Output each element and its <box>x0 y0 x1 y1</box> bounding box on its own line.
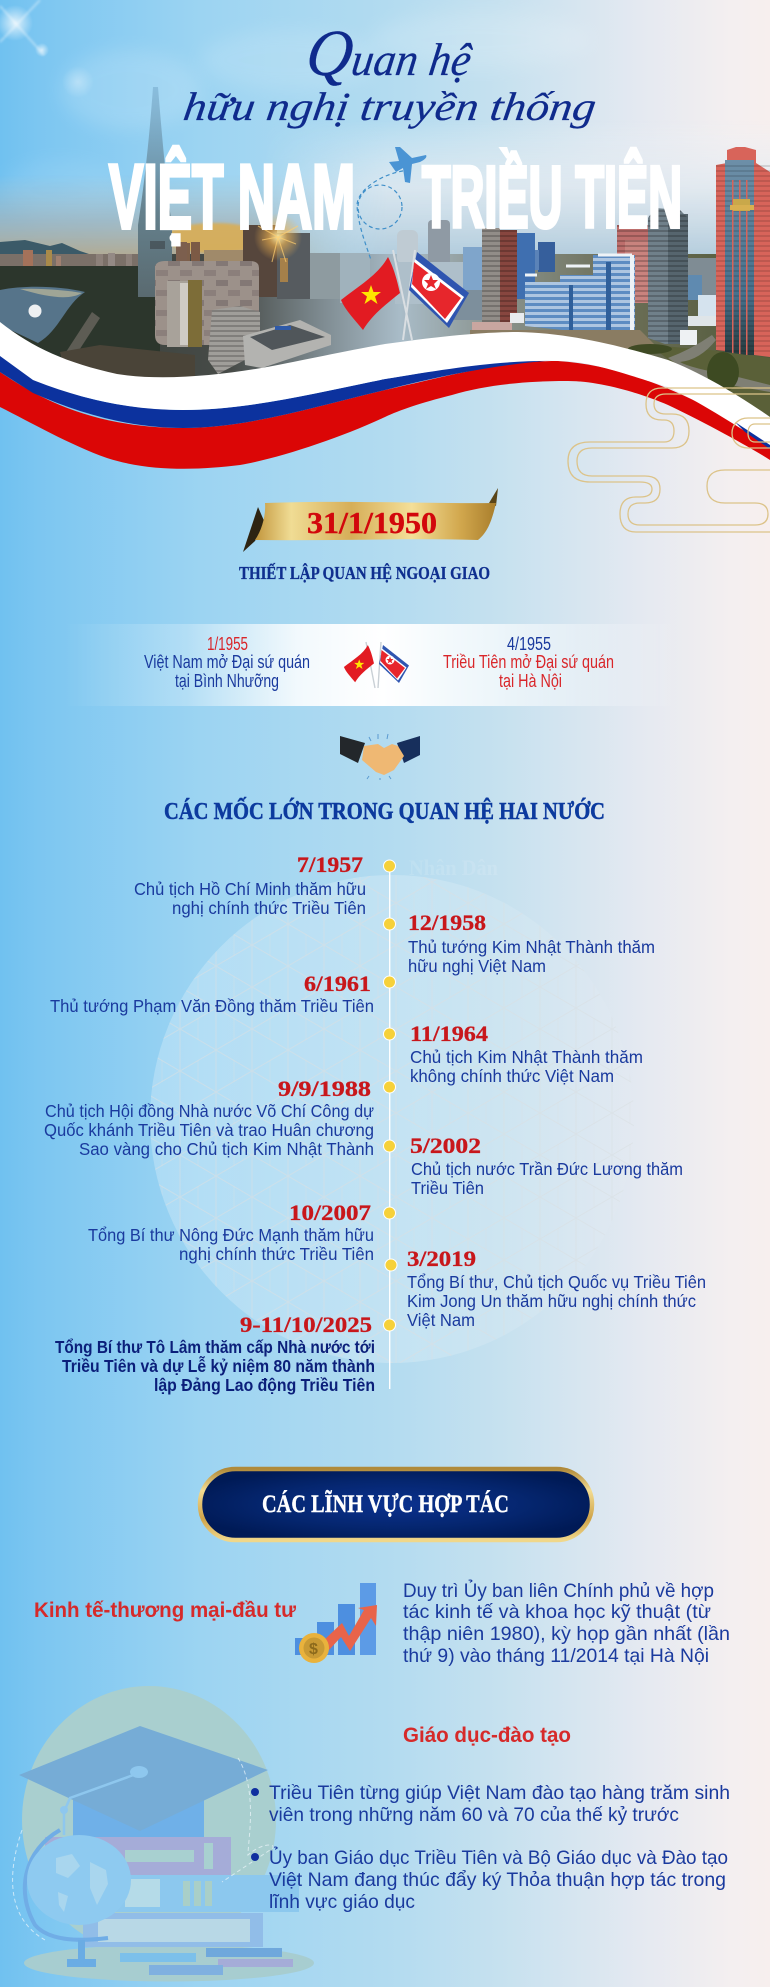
red hotel tower <box>716 147 770 357</box>
Lotte tower <box>138 87 187 297</box>
milestone 5/2002: Chủ tịch nước Trần Đức Lương thăm <box>411 1159 683 1179</box>
milestone 10/2007: Tổng Bí thư Nông Đức Mạnh thăm hữu <box>88 1225 374 1245</box>
bullet 1: viên trong những năm 60 và 70 của thế kỷ trước <box>269 1804 679 1826</box>
banner tail left <box>243 507 265 552</box>
left: distant mountains and district <box>0 240 243 266</box>
milestone 6/1961 <box>50 971 374 1016</box>
milestone 12/1958 <box>408 910 655 976</box>
subheading: diplomatic relations: THIẾT LẬP QUAN HỆ NGOẠI GIAO <box>239 563 490 583</box>
ribbon white band <box>0 322 770 447</box>
milestone 5/2002 <box>410 1133 683 1198</box>
milestone 10/2007 <box>88 1200 374 1264</box>
milestone 9/9/1988 <box>44 1076 374 1159</box>
distant right buildings <box>688 258 716 326</box>
grey glass tower <box>648 208 697 345</box>
milestone 11/1964: 11/1964 <box>410 1021 488 1046</box>
date: 31/1/1950 <box>307 505 437 540</box>
title: script heading <box>181 17 599 129</box>
heading pill: cooperation fields <box>200 1469 592 1540</box>
DPRK flag <box>409 252 469 328</box>
milestone 6/1961: 6/1961 <box>304 971 371 996</box>
title line 2: hữu nghị truyền thống <box>181 84 599 129</box>
milestone 9-11/10/2025: Tổng Bí thư Tô Lâm thăm cấp Nhà nước tới <box>55 1337 375 1357</box>
bullet 2: lĩnh vực giáo dục <box>269 1891 415 1913</box>
cap base <box>73 1790 204 1838</box>
milestone 11/1964 <box>410 1021 643 1086</box>
pink tower <box>617 225 648 303</box>
pencils <box>120 1948 293 1975</box>
right: DPRK embassy <box>443 634 614 691</box>
left: Vietnam embassy: Việt Nam mở Đại sứ quán <box>144 652 310 672</box>
left: Vietnam embassy: tại Bình Nhưỡng <box>175 671 279 691</box>
ribbon: red, blue and white waves <box>0 322 770 469</box>
education heading: Giáo dục-đào tạo <box>403 1724 571 1747</box>
graduation cap top <box>19 1726 268 1831</box>
section: education and training <box>251 1724 730 1913</box>
icon: handshake <box>340 734 420 780</box>
gold line decoration <box>568 388 770 532</box>
backdrop circle <box>22 1686 276 1954</box>
milestone 3/2019: Việt Nam <box>407 1310 475 1330</box>
ribbon blue band <box>0 354 558 428</box>
sun-lit towers <box>243 213 370 303</box>
milestone 7/1957: nghị chính thức Triều Tiên <box>172 898 366 918</box>
heading: milestones: CÁC MỐC LỚN TRONG QUAN HỆ HAI NƯỚC <box>164 798 605 825</box>
milestone 3/2019: 3/2019 <box>407 1246 476 1271</box>
milestone 11/1964: Chủ tịch Kim Nhật Thành thăm <box>410 1047 643 1067</box>
banner band <box>255 502 496 540</box>
right: DPRK embassy: Triều Tiên mở Đại sứ quán <box>443 652 614 672</box>
milestone 3/2019 <box>407 1246 706 1330</box>
left: Vietnam embassy <box>144 634 310 691</box>
header: sky glow and map clouds <box>0 0 590 220</box>
milestone 9-11/10/2025 <box>55 1312 375 1395</box>
Vietnam flag <box>341 257 400 330</box>
front low buildings <box>208 306 331 374</box>
bullet 1: Triều Tiên từng giúp Việt Nam đào tạo hàng trăm sinh <box>269 1782 730 1804</box>
heading pill: cooperation fields: CÁC LĨNH VỰC HỢP TÁC <box>262 1490 509 1518</box>
section: economy, trade, investment <box>34 1578 730 1667</box>
milestone 12/1958: hữu nghị Việt Nam <box>408 956 546 976</box>
milestone 3/2019: Tổng Bí thư, Chủ tịch Quốc vụ Triều Tiên <box>407 1272 706 1292</box>
bullet 2: Ủy ban Giáo dục Triều Tiên và Bộ Giáo dục và Đào tạo <box>269 1845 728 1869</box>
ground plane <box>160 254 770 376</box>
icon: plane with dashed route <box>357 147 426 260</box>
economy text: tác kinh tế và khoa học kỹ thuật (từ <box>403 1601 711 1623</box>
economy text: Duy trì Ủy ban liên Chính phủ về hợp <box>403 1578 714 1602</box>
book stack <box>45 1837 299 1947</box>
icon: growth chart with coin <box>295 1583 377 1663</box>
blue towers <box>517 233 555 299</box>
ribbon blue sliver, right <box>735 422 770 449</box>
tall brown tower <box>472 228 517 330</box>
watermark: Nhân Dân <box>409 855 498 880</box>
milestone 9-11/10/2025: lập Đảng Lao động Triều Tiên <box>154 1375 375 1395</box>
white sphere on the lake <box>28 304 42 318</box>
milestone 7/1957: Chủ tịch Hồ Chí Minh thăm hữu <box>134 879 366 899</box>
large grey building <box>155 261 259 347</box>
bullet 2: Việt Nam đang thúc đẩy ký Thỏa thuận hợp tác trong <box>269 1869 726 1891</box>
Việt Nam: VIỆT NAM <box>109 146 355 248</box>
panel: embassy openings <box>64 624 678 706</box>
milestone 3/2019: Kim Jong Un thăm hữu nghị chính thức <box>407 1291 696 1311</box>
dashed arcs <box>13 1758 273 1940</box>
milestone 7/1957: 7/1957 <box>297 852 363 877</box>
sky behind the skyline <box>0 131 770 254</box>
economy text: thập niên 1980), kỳ họp gần nhất (lần <box>403 1623 730 1645</box>
bullet 2 <box>251 1845 728 1913</box>
milestone 9/9/1988: Quốc khánh Triều Tiên và trao Huân chương <box>44 1120 374 1140</box>
milestone 9-11/10/2025: Triều Tiên và dự Lễ kỷ niệm 80 năm thành <box>62 1355 375 1376</box>
blue apartment complex <box>470 255 660 350</box>
header photo: city skyline <box>0 87 770 434</box>
economy text <box>403 1578 730 1667</box>
milestone 10/2007: 10/2007 <box>289 1200 371 1225</box>
icon: large crossed flags <box>341 250 469 340</box>
left: Vietnam embassy: 1/1955 <box>207 634 248 654</box>
title: country names <box>109 146 682 248</box>
title line 1: Quan hệ <box>302 17 478 90</box>
right: DPRK embassy: tại Hà Nội <box>499 671 562 691</box>
right foreground: trees and road <box>628 335 770 420</box>
left: dark trees and lake <box>0 266 195 377</box>
timeline axis <box>389 866 390 1389</box>
illustration: graduation cap, books and globe <box>13 1686 314 1982</box>
milestone 9/9/1988: Sao vàng cho Chủ tịch Kim Nhật Thành <box>79 1139 374 1159</box>
milestone 11/1964: không chính thức Việt Nam <box>410 1066 614 1086</box>
milestone 9/9/1988: Chủ tịch Hội đồng Nhà nước Võ Chí Công dự <box>45 1101 374 1121</box>
banner tail right <box>489 488 498 506</box>
timeline <box>44 852 706 1395</box>
ground ellipse <box>24 1944 314 1982</box>
economy heading: Kinh tế-thương mại-đầu tư <box>34 1599 297 1622</box>
pale distant towers <box>395 220 484 320</box>
milestone 9/9/1988: 9/9/1988 <box>278 1076 371 1101</box>
economy text: thứ 9) vào tháng 11/2014 tại Hà Nội <box>403 1645 709 1667</box>
milestone 10/2007: nghị chính thức Triều Tiên <box>179 1244 374 1264</box>
globe <box>25 1830 131 1967</box>
timeline dots <box>384 860 397 1331</box>
tassel <box>60 1766 148 1835</box>
milestone 12/1958: Thủ tướng Kim Nhật Thành thăm <box>408 937 655 957</box>
patterned circle behind timeline <box>150 875 634 1363</box>
milestone 9-11/10/2025: 9-11/10/2025 <box>240 1312 372 1337</box>
milestone 5/2002: Triều Tiên <box>411 1178 484 1198</box>
bullet 1 <box>251 1782 730 1826</box>
milestone 6/1961: Thủ tướng Phạm Văn Đồng thăm Triều Tiên <box>50 996 374 1016</box>
icon: small crossed flags <box>344 642 409 688</box>
milestone 12/1958: 12/1958 <box>408 910 486 935</box>
milestone 5/2002: 5/2002 <box>410 1133 481 1158</box>
icon: growth chart with coin: $ <box>309 1641 318 1658</box>
ribbon red band <box>0 361 770 469</box>
right: DPRK embassy: 4/1955 <box>507 634 551 654</box>
milestone 7/1957 <box>134 852 366 918</box>
gold ribbon banner with date <box>243 488 498 552</box>
